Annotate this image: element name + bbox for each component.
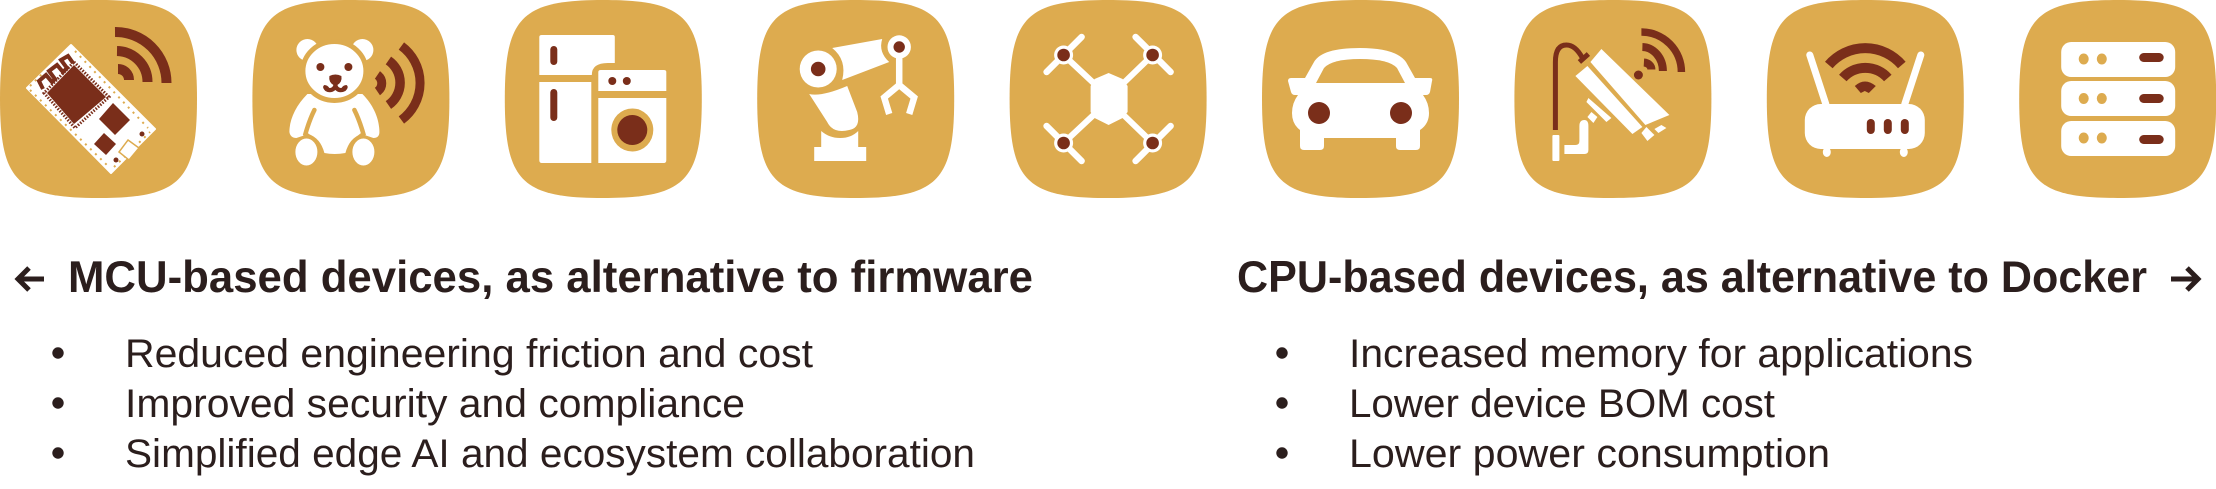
- bullet list: MCU benefits: Reduced engineering friction and cost: [125, 332, 813, 376]
- arrow: right: [2171, 268, 2198, 290]
- icon tile: connected teddy bear: [252, 0, 449, 198]
- icon tile: MCU board with wifi: [0, 0, 197, 198]
- icon tile: drone: [1010, 0, 1207, 198]
- bullet list: MCU benefits: Simplified edge AI and ecosystem collaboration: [125, 432, 975, 476]
- bullet list: MCU benefits: Improved security and compliance: [125, 382, 745, 426]
- bullet list: CPU benefits: Lower power consumption: [1349, 432, 1830, 476]
- icon tile: robotic arm: [757, 0, 954, 198]
- bullet list: MCU benefits: [52, 332, 975, 476]
- icon tile: street camera with wifi: [1514, 0, 1711, 198]
- arrow: left: [18, 268, 44, 290]
- bullet list: CPU benefits: [1276, 332, 1973, 476]
- heading: CPU-based devices: CPU-based devices, as alternative to Docker: [1237, 253, 2147, 302]
- icon tile: server rack: [2019, 0, 2216, 198]
- heading: MCU-based devices: MCU-based devices, as alternative to firmware: [68, 253, 1033, 302]
- bullet list: CPU benefits: Lower device BOM cost: [1349, 382, 1775, 426]
- bullet list: CPU benefits: Increased memory for applications: [1349, 332, 1973, 376]
- icon tile: wifi router: [1767, 0, 1964, 198]
- icon tile: car: [1262, 0, 1459, 198]
- icon tile: fridge and washing machine: [505, 0, 702, 198]
